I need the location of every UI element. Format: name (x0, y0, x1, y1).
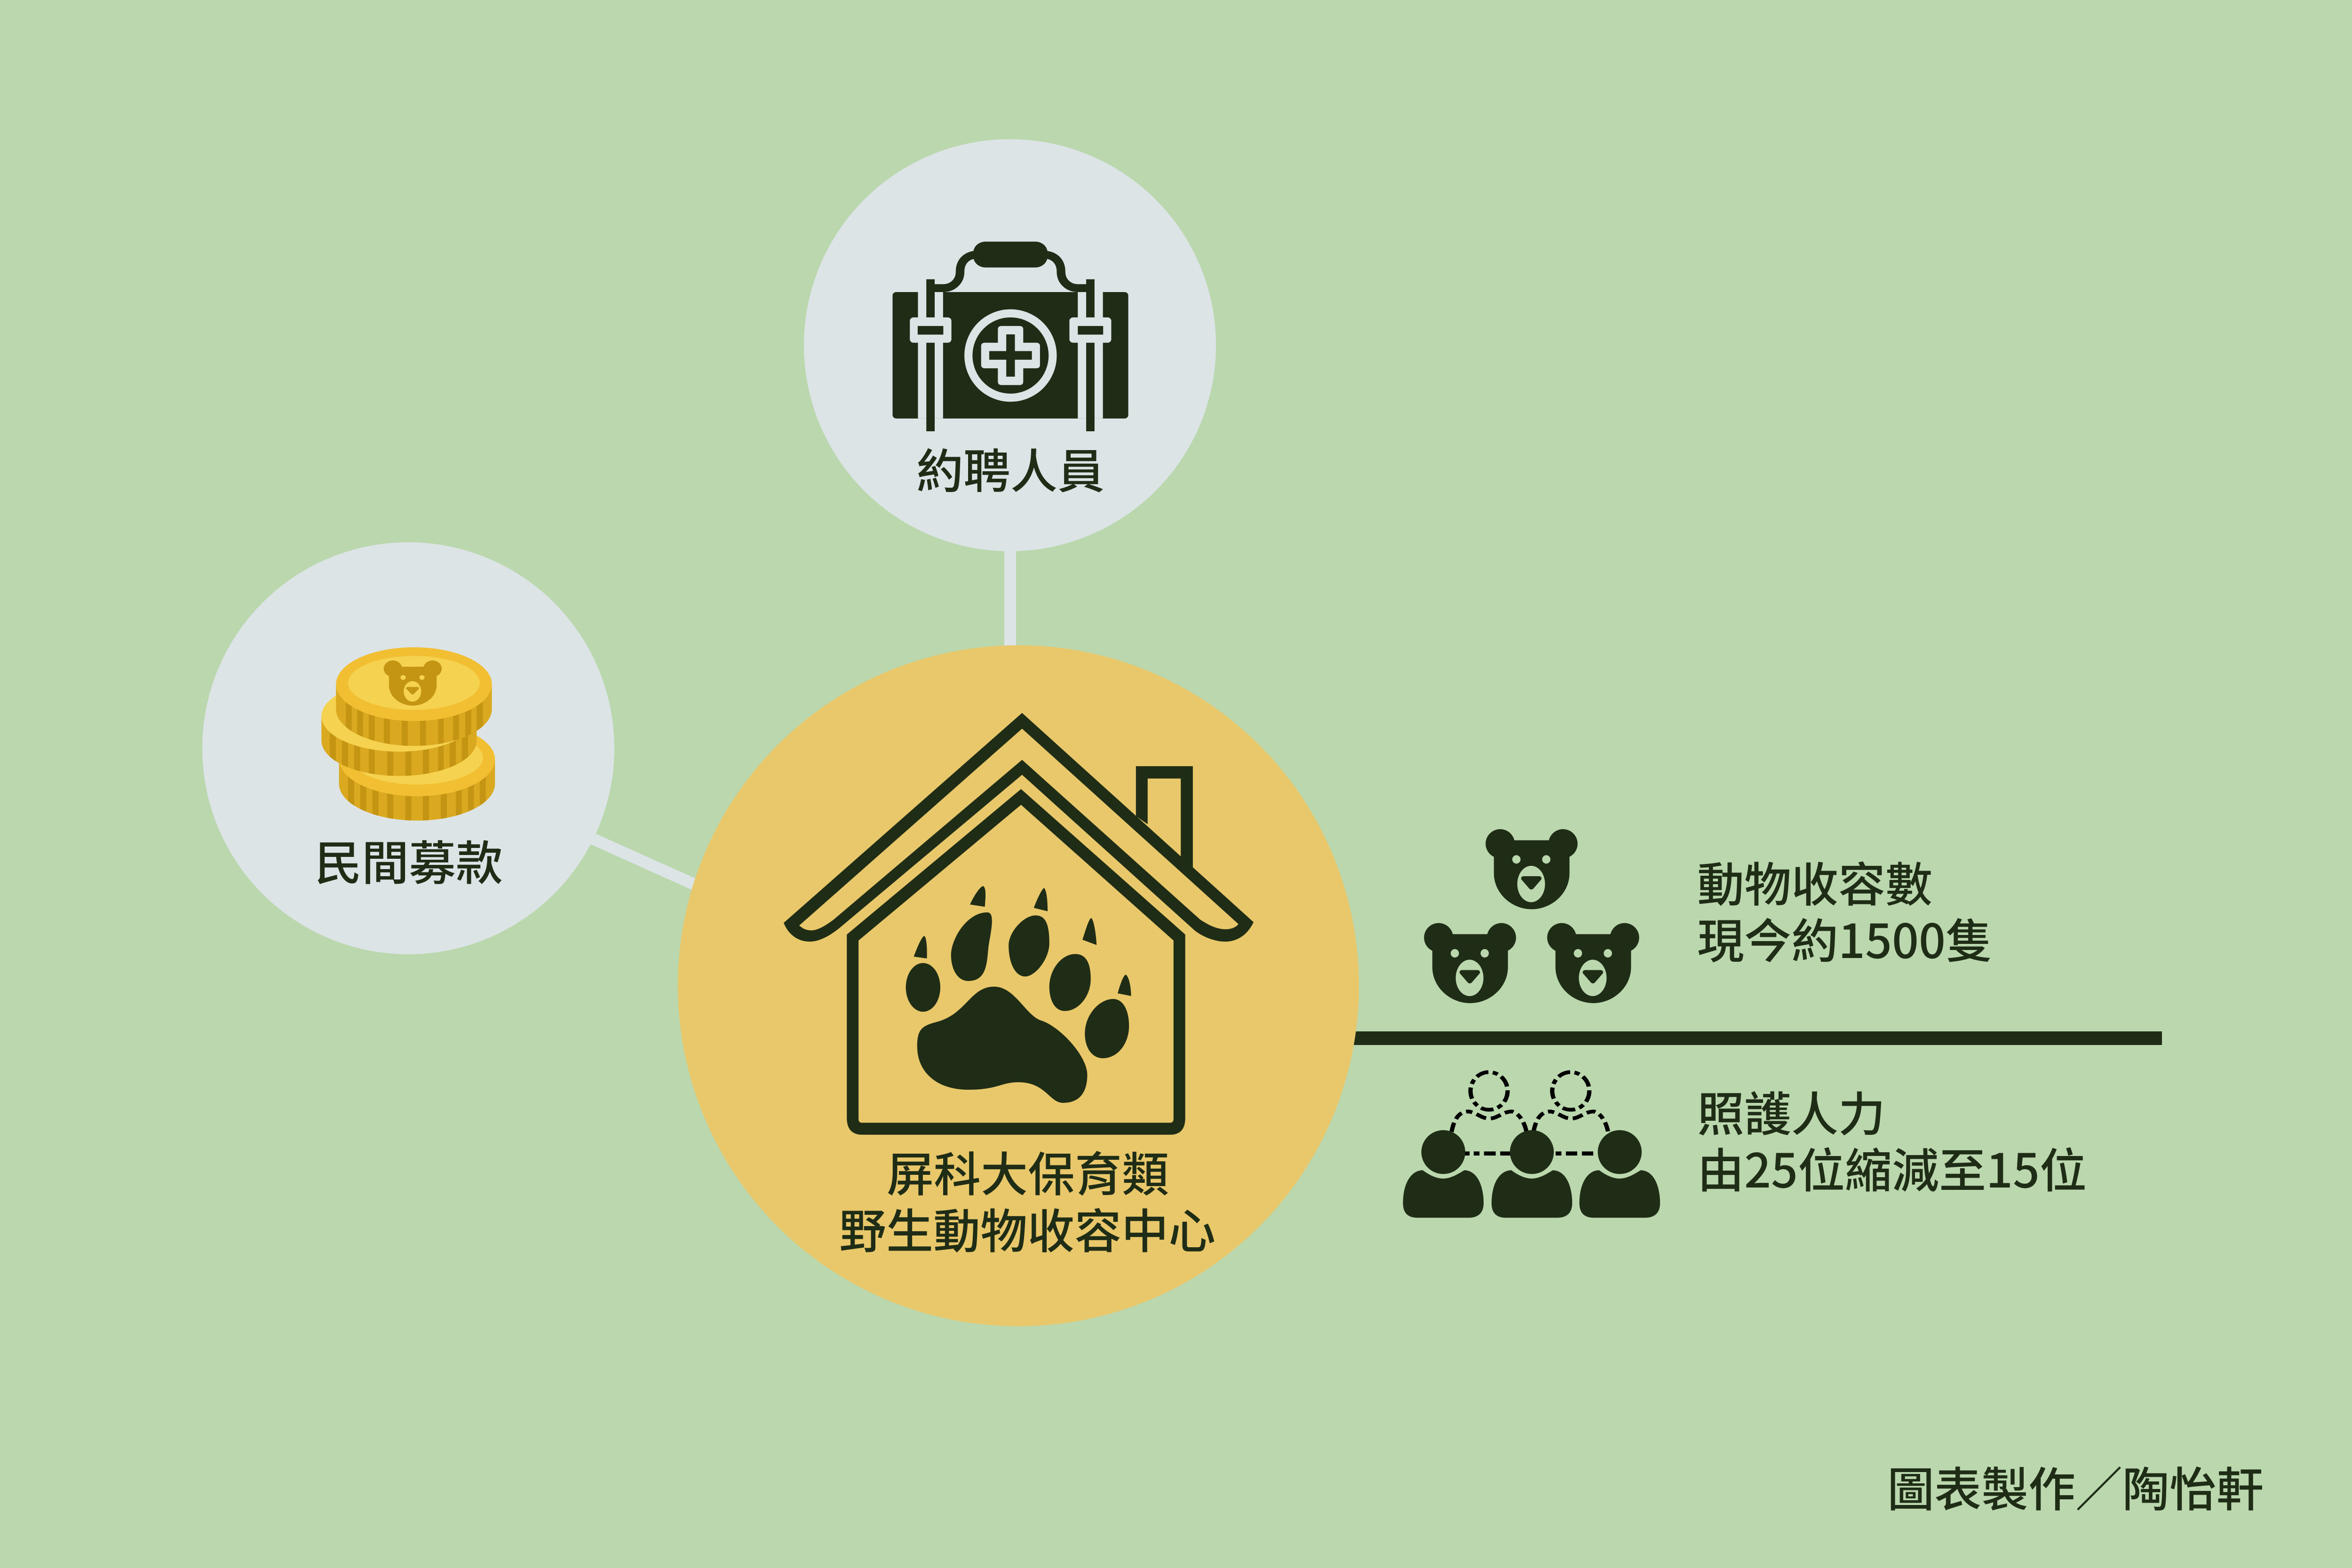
connector: left circle to centre (590, 834, 701, 892)
label: rescue centre name: 屏科大保育類 (887, 1137, 1169, 1205)
panel: rescue centre (678, 645, 1359, 1326)
credit: 圖表製作／陶怡軒 (1887, 1452, 2264, 1520)
connector: top circle to centre (1004, 546, 1016, 651)
label: rescue centre name: 野生動物收容中心 (839, 1194, 1216, 1262)
icon: house with paw (784, 713, 1254, 1135)
bear: top (1486, 829, 1578, 909)
dashes between carers (1464, 1151, 1593, 1156)
bear: left (1424, 923, 1516, 1003)
coin: top (336, 647, 492, 746)
divider bar (1352, 1031, 2162, 1045)
panel: hiring staff (804, 139, 1216, 551)
coin: middle (321, 695, 477, 776)
icon: medical bag (892, 242, 1128, 431)
label: public donations: 民間募款 (315, 825, 503, 894)
removed carers: dashed outlines (1452, 1072, 1608, 1132)
icon: carers reduced (1403, 1072, 1660, 1218)
text: carers: 由25位縮減至15位 (1697, 1133, 2087, 1201)
icon: three bears (1424, 829, 1639, 1003)
remaining carers (1403, 1130, 1660, 1218)
icon: stacked bear coins (321, 647, 495, 821)
coin: bottom (339, 736, 495, 821)
bear: right (1547, 923, 1639, 1003)
text: carers: 照護人力 (1697, 1077, 1885, 1145)
icon: bear face on coin (384, 660, 442, 705)
panel: public donations (202, 542, 614, 954)
text: animals housed: 現今約1500隻 (1697, 903, 1993, 972)
label: hiring staff: 約聘人員 (916, 434, 1104, 502)
text: animals housed: 動物收容數 (1697, 847, 1932, 915)
